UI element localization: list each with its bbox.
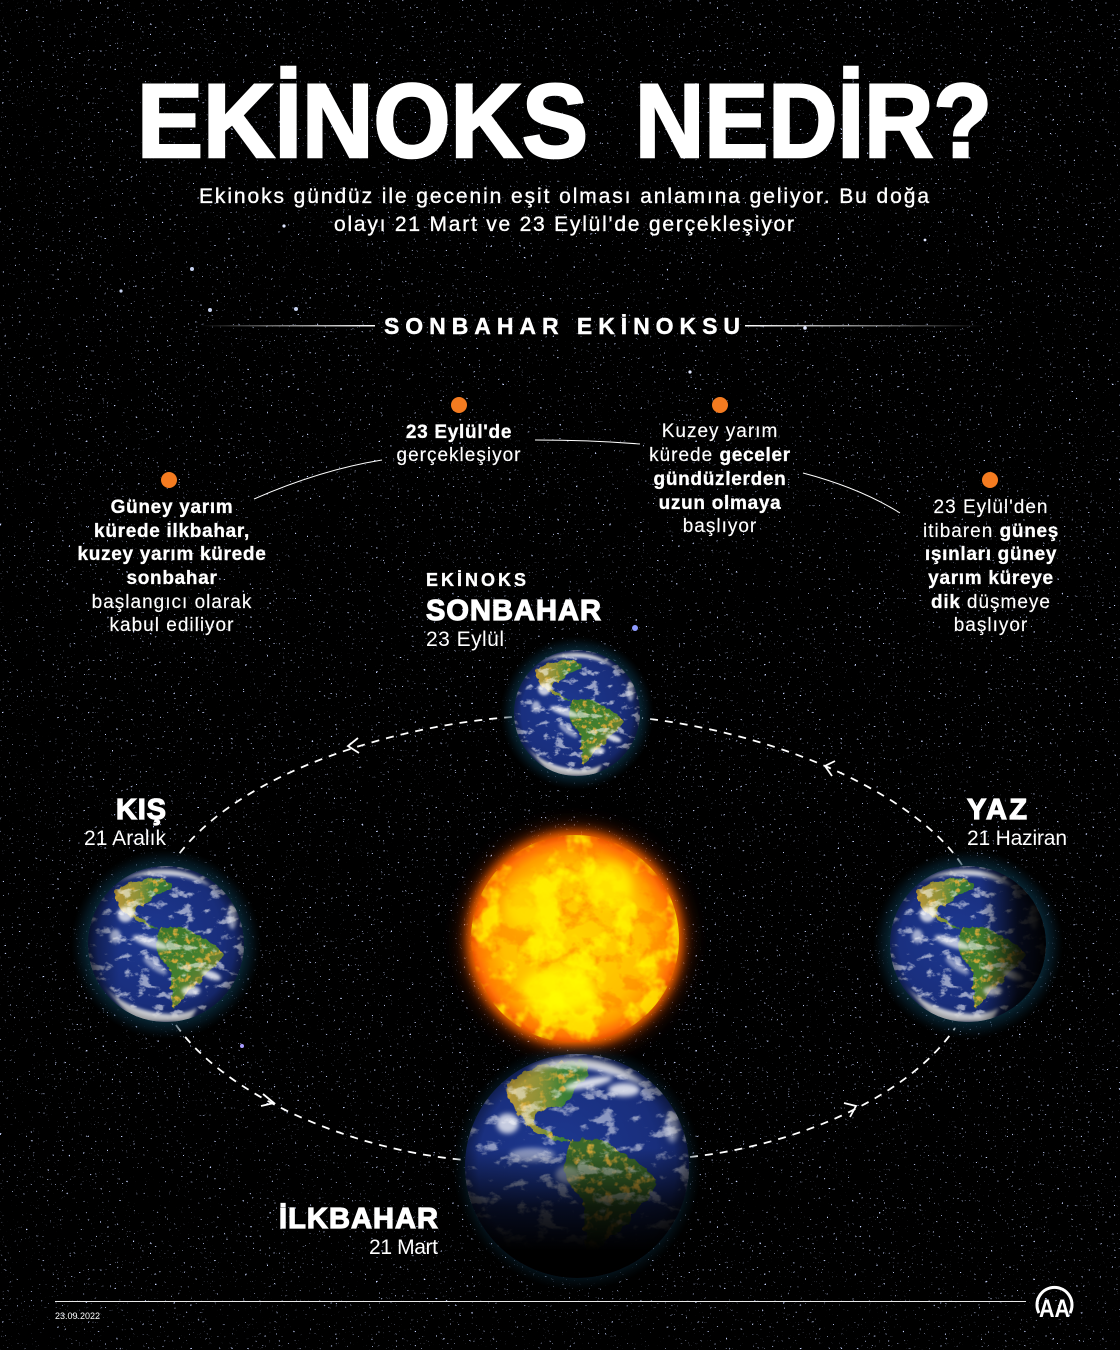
info: center right: gündüzlerden <box>654 469 786 490</box>
earth: summer (right) <box>873 849 1063 1039</box>
earth: spring (bottom) <box>453 1042 701 1290</box>
title: EKİNOKS <box>137 63 588 180</box>
info: center right: kürede geceler <box>649 445 791 466</box>
connector curves <box>254 440 900 513</box>
info: left: kabul ediliyor <box>110 615 234 636</box>
info: center right <box>649 397 791 537</box>
info: center right: başlıyor <box>683 516 757 537</box>
info: left: sonbahar <box>126 568 218 589</box>
footer rule and date: 23.09.2022 <box>55 1311 100 1321</box>
info: left: başlangıcı olarak <box>92 592 252 613</box>
info: left: Güney yarım <box>111 497 233 518</box>
info: right: itibaren güneş <box>923 521 1059 542</box>
info: left <box>78 472 266 636</box>
logo: AA: AA <box>1039 1295 1070 1323</box>
label: ilkbahar: İLKBAHAR <box>279 1203 438 1235</box>
label: ekinoks sonbahar: 23 Eylül <box>426 628 504 651</box>
label: yaz <box>967 794 1067 850</box>
info: center left <box>397 397 521 466</box>
label: ekinoks sonbahar <box>426 570 601 651</box>
label: yaz: YAZ <box>967 794 1027 826</box>
label: ekinoks sonbahar: EKİNOKS <box>426 570 526 590</box>
info: right: dik düşmeye <box>931 592 1051 613</box>
info: right <box>923 472 1059 636</box>
info: center left: 23 Eylül'de <box>406 422 512 443</box>
subtitle: olayı 21 Mart ve 23 Eylül'de gerçekleşiyor <box>334 213 794 236</box>
info: center right: uzun olmaya <box>659 493 781 514</box>
subtitle: Ekinoks gündüz ile gecenin eşit olması anlamına geliyor. Bu doğa <box>199 185 929 208</box>
label: yaz: 21 Haziran <box>967 827 1067 850</box>
info: right: ışınları güney <box>925 544 1057 565</box>
label: kış: KIŞ <box>116 794 166 826</box>
label: kış: 21 Aralık <box>84 827 166 850</box>
info: left: kuzey yarım kürede <box>78 544 266 565</box>
info: right: 23 Eylül'den <box>934 497 1048 518</box>
info: center left: gerçekleşiyor <box>397 445 521 466</box>
sun <box>465 829 685 1049</box>
label: ilkbahar <box>279 1203 438 1259</box>
orbit path with arrows <box>176 717 962 1160</box>
info: center right: Kuzey yarım <box>662 421 778 442</box>
earth: winter (left) <box>71 849 261 1039</box>
info: right: yarım küreye <box>928 568 1054 589</box>
label: ilkbahar: 21 Mart <box>369 1236 438 1259</box>
info: right: başlıyor <box>954 615 1028 636</box>
logo: AA <box>1037 1287 1072 1323</box>
subtitle <box>199 185 929 236</box>
section heading: Sonbahar Ekinoksu: SONBAHAR EKİNOKSU <box>384 313 740 339</box>
title <box>137 63 992 180</box>
earth: autumn (top) <box>500 636 654 790</box>
label: kış <box>84 794 166 850</box>
label: ekinoks sonbahar: SONBAHAR <box>426 595 601 627</box>
info: left: kürede ilkbahar, <box>94 521 250 542</box>
title: NEDİR? <box>635 63 992 180</box>
